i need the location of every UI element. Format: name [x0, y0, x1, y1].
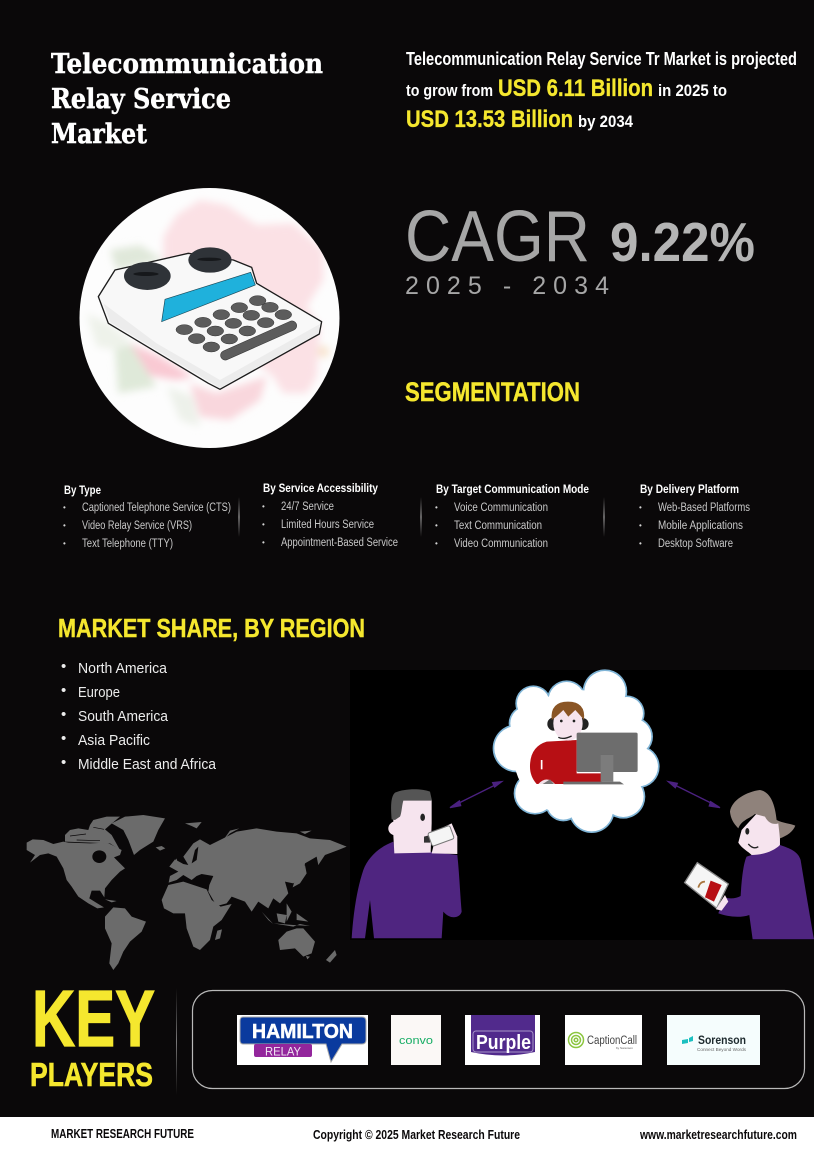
CAGR figure: 2025 - 2034 [405, 272, 609, 300]
title: Relay Service [51, 84, 231, 115]
segment column: by target communication mode: • [435, 539, 438, 548]
segment column: by delivery platform: • [639, 539, 642, 548]
key players heading: KEY [32, 974, 155, 1063]
segment column: by service accessibility: • [262, 520, 265, 529]
segment column: by service accessibility: 24/7 Service [281, 501, 334, 513]
region list: • [61, 658, 66, 675]
segment column: by target communication mode: Voice Communication [454, 502, 548, 514]
segment column: by service accessibility [262, 481, 398, 549]
footer: Copyright © 2025 Market Research Future [313, 1128, 520, 1142]
segment column: by delivery platform: By Delivery Platform [640, 482, 739, 496]
market projection text: USD 13.53 Billion [406, 106, 573, 133]
logo: Convo [391, 1015, 441, 1065]
segment column: by type: Captioned Telephone Service (CTS) [82, 502, 231, 514]
segment column: by target communication mode: Video Communication [454, 538, 548, 550]
segment column: by delivery platform: Desktop Software [658, 538, 733, 550]
cloud [493, 669, 660, 833]
CAGR figure: 9.22% [610, 211, 755, 273]
logo: Sorenson [667, 1015, 760, 1065]
key players heading [30, 974, 155, 1093]
key players heading: PLAYERS [30, 1056, 153, 1093]
market projection text: USD 6.11 Billion [498, 75, 653, 102]
logo: Hamilton Relay: HAMILTON [252, 1021, 353, 1043]
segmentation heading: SEGMENTATION [405, 377, 580, 407]
illustration: relay telephone device on flower circle [80, 188, 340, 448]
segment column: by target communication mode: By Target Communication Mode [436, 482, 589, 496]
logo: Sorenson: Sorenson [698, 1033, 746, 1047]
segment column: by target communication mode: • [435, 503, 438, 512]
segment column: by target communication mode [435, 482, 589, 550]
segment column: by service accessibility: By Service Accessibility [263, 481, 378, 495]
key players panel [192, 990, 804, 1088]
market projection text: to grow from [406, 81, 493, 100]
region list: • [61, 730, 66, 747]
man on phone [352, 789, 462, 938]
segment column: by type: Text Telephone (TTY) [82, 538, 173, 550]
segment column: by service accessibility: • [262, 502, 265, 511]
logo: Convo: convo [399, 1035, 433, 1047]
logo: CaptionCall [565, 1015, 642, 1065]
region list: • [61, 706, 66, 723]
segment column: by type: By Type [64, 483, 101, 497]
left arrow [450, 782, 502, 808]
segment column: by delivery platform: Mobile Applications [658, 520, 743, 532]
segment column: by service accessibility: Limited Hours Service [281, 519, 374, 531]
logo: Purple [465, 1015, 540, 1065]
region list [61, 658, 217, 773]
region list: North America [78, 660, 168, 677]
region list: • [61, 682, 66, 699]
segment column: by type: Video Relay Service (VRS) [82, 520, 192, 532]
CAGR figure: CAGR [405, 197, 590, 277]
region list: South America [78, 708, 169, 725]
segment column: by delivery platform [639, 482, 750, 550]
title: Market [51, 119, 147, 150]
segment column: by delivery platform: • [639, 521, 642, 530]
region list: Middle East and Africa [78, 756, 217, 773]
segment column: by target communication mode: • [435, 521, 438, 530]
segment column: by service accessibility: • [262, 538, 265, 547]
market projection text: by 2034 [578, 112, 633, 131]
logo: CaptionCall: by Sorenson [616, 1046, 633, 1050]
market projection text: in 2025 to [658, 81, 727, 100]
illustration: relay call between two people [350, 669, 814, 940]
logo: Sorenson: Connect Beyond Words [697, 1047, 747, 1052]
segment column: by target communication mode: Text Communication [454, 520, 542, 532]
world map [27, 815, 347, 970]
region list: Europe [78, 684, 120, 701]
woman with tablet [685, 790, 814, 939]
region list: Asia Pacific [78, 732, 150, 749]
logo: CaptionCall: CaptionCall [587, 1035, 637, 1047]
right arrow [668, 782, 720, 808]
footer: MARKET RESEARCH FUTURE [51, 1127, 194, 1141]
segment column: by type [63, 483, 231, 550]
logo: Hamilton Relay: RELAY [265, 1044, 301, 1058]
segment column: by type: • [63, 539, 66, 548]
title [51, 49, 323, 150]
segment column: by delivery platform: Web-Based Platforms [658, 502, 750, 514]
segment column: by type: • [63, 503, 66, 512]
CAGR figure [405, 197, 755, 300]
footer [0, 1117, 814, 1150]
logo: Hamilton Relay [237, 1015, 368, 1065]
title: Telecommunication [51, 49, 323, 80]
market projection text [406, 49, 797, 133]
region list: • [61, 754, 66, 771]
logo: Purple: Purple [476, 1032, 531, 1054]
market share heading: MARKET SHARE, BY REGION [58, 613, 365, 643]
relay operator at computer [530, 702, 638, 784]
segment column: by service accessibility: Appointment-Based Service [281, 537, 398, 549]
segment column: by delivery platform: • [639, 503, 642, 512]
segment column: by type: • [63, 521, 66, 530]
